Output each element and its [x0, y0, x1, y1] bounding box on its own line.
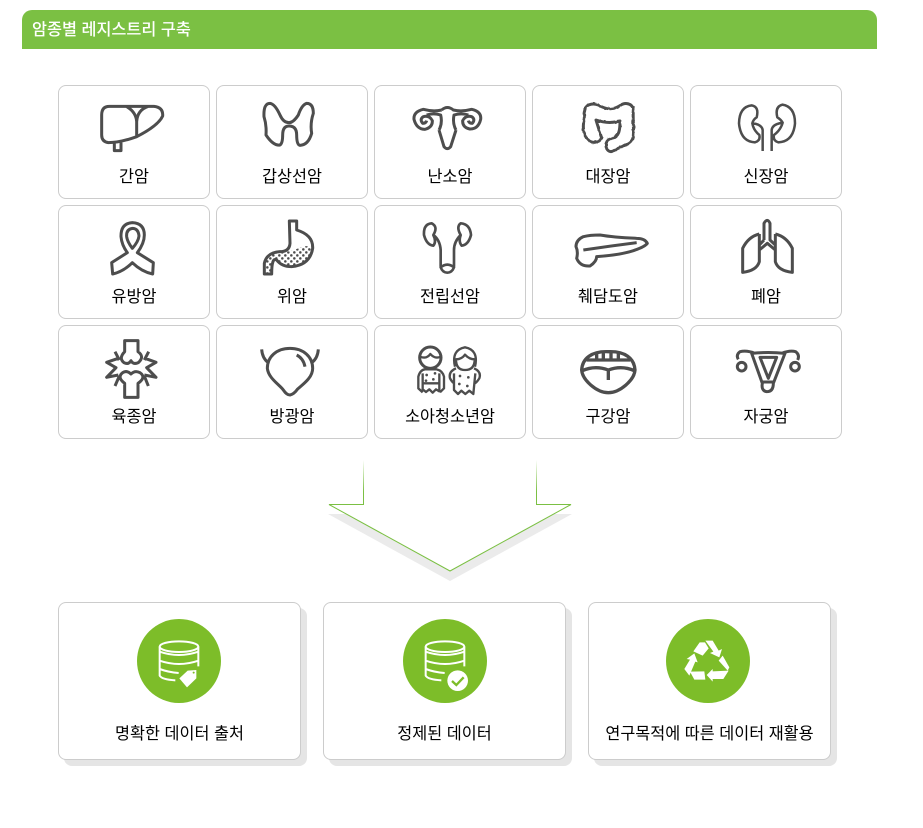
card: lung cancer: [690, 205, 842, 319]
card: bladder cancer: [216, 325, 368, 439]
card: ovarian cancer: 난소암: [428, 168, 472, 186]
icon: prostate: [422, 222, 472, 274]
card: breast cancer: 유방암: [112, 288, 156, 306]
panel: refined data: 정제된 데이터: [397, 725, 492, 743]
card: kidney cancer: 신장암: [744, 168, 788, 186]
card: bladder cancer: 방광암: [270, 408, 314, 426]
card: oral cancer: 구강암: [586, 408, 630, 426]
icon: stomach: [262, 220, 314, 276]
icon: uterus: [736, 350, 801, 394]
card: stomach cancer: [216, 205, 368, 319]
icon: database with tag: [137, 619, 221, 703]
title: [22, 10, 877, 49]
card: cervical cancer: 자궁암: [744, 408, 788, 426]
card: kidney cancer: [690, 85, 842, 199]
card: thyroid cancer: [216, 85, 368, 199]
icon: recycle: [666, 619, 750, 703]
icon: kidneys: [738, 103, 796, 151]
icon: lungs: [741, 218, 794, 274]
card: stomach cancer: 위암: [277, 288, 307, 306]
panel: data reuse for research: [588, 602, 831, 760]
icon: bladder: [260, 346, 320, 396]
card: prostate cancer: 전립선암: [420, 288, 480, 306]
panel: refined data: [323, 602, 566, 760]
card: colorectal cancer: [532, 85, 684, 199]
card: biliary pancreatic cancer: 췌담도암: [578, 288, 638, 306]
card: sarcoma: 육종암: [112, 408, 156, 426]
title: 암종별 레지스트리 구축: [32, 21, 191, 39]
card: sarcoma: [58, 325, 210, 439]
card: oral cancer: [532, 325, 684, 439]
icon: children: [417, 346, 482, 396]
icon: ribbon: [110, 221, 155, 276]
card: prostate cancer: [374, 205, 526, 319]
card: cervical cancer: [690, 325, 842, 439]
card: liver cancer: 간암: [119, 168, 149, 186]
icon: ovary: [412, 106, 482, 150]
icon: bone joint: [105, 339, 158, 399]
card: breast cancer: [58, 205, 210, 319]
icon: liver: [100, 104, 164, 152]
icon: database with check: [403, 619, 487, 703]
card: lung cancer: 폐암: [751, 288, 781, 306]
icon: pancreas: [574, 234, 649, 268]
panel: clear data source: 명확한 데이터 출처: [115, 725, 244, 743]
icon: mouth: [580, 350, 637, 394]
icon: thyroid: [262, 102, 315, 147]
panel: clear data source: [58, 602, 301, 760]
card: ovarian cancer: [374, 85, 526, 199]
card: pediatric cancer: 소아청소년암: [405, 408, 495, 426]
card: thyroid cancer: 갑상선암: [262, 168, 322, 186]
card: pediatric cancer: [374, 325, 526, 439]
card: liver cancer: [58, 85, 210, 199]
panel: data reuse for research: 연구목적에 따른 데이터 재활용: [605, 725, 814, 743]
card: colorectal cancer: 대장암: [586, 168, 630, 186]
card: biliary pancreatic cancer: [532, 205, 684, 319]
icon: colon: [582, 102, 636, 154]
